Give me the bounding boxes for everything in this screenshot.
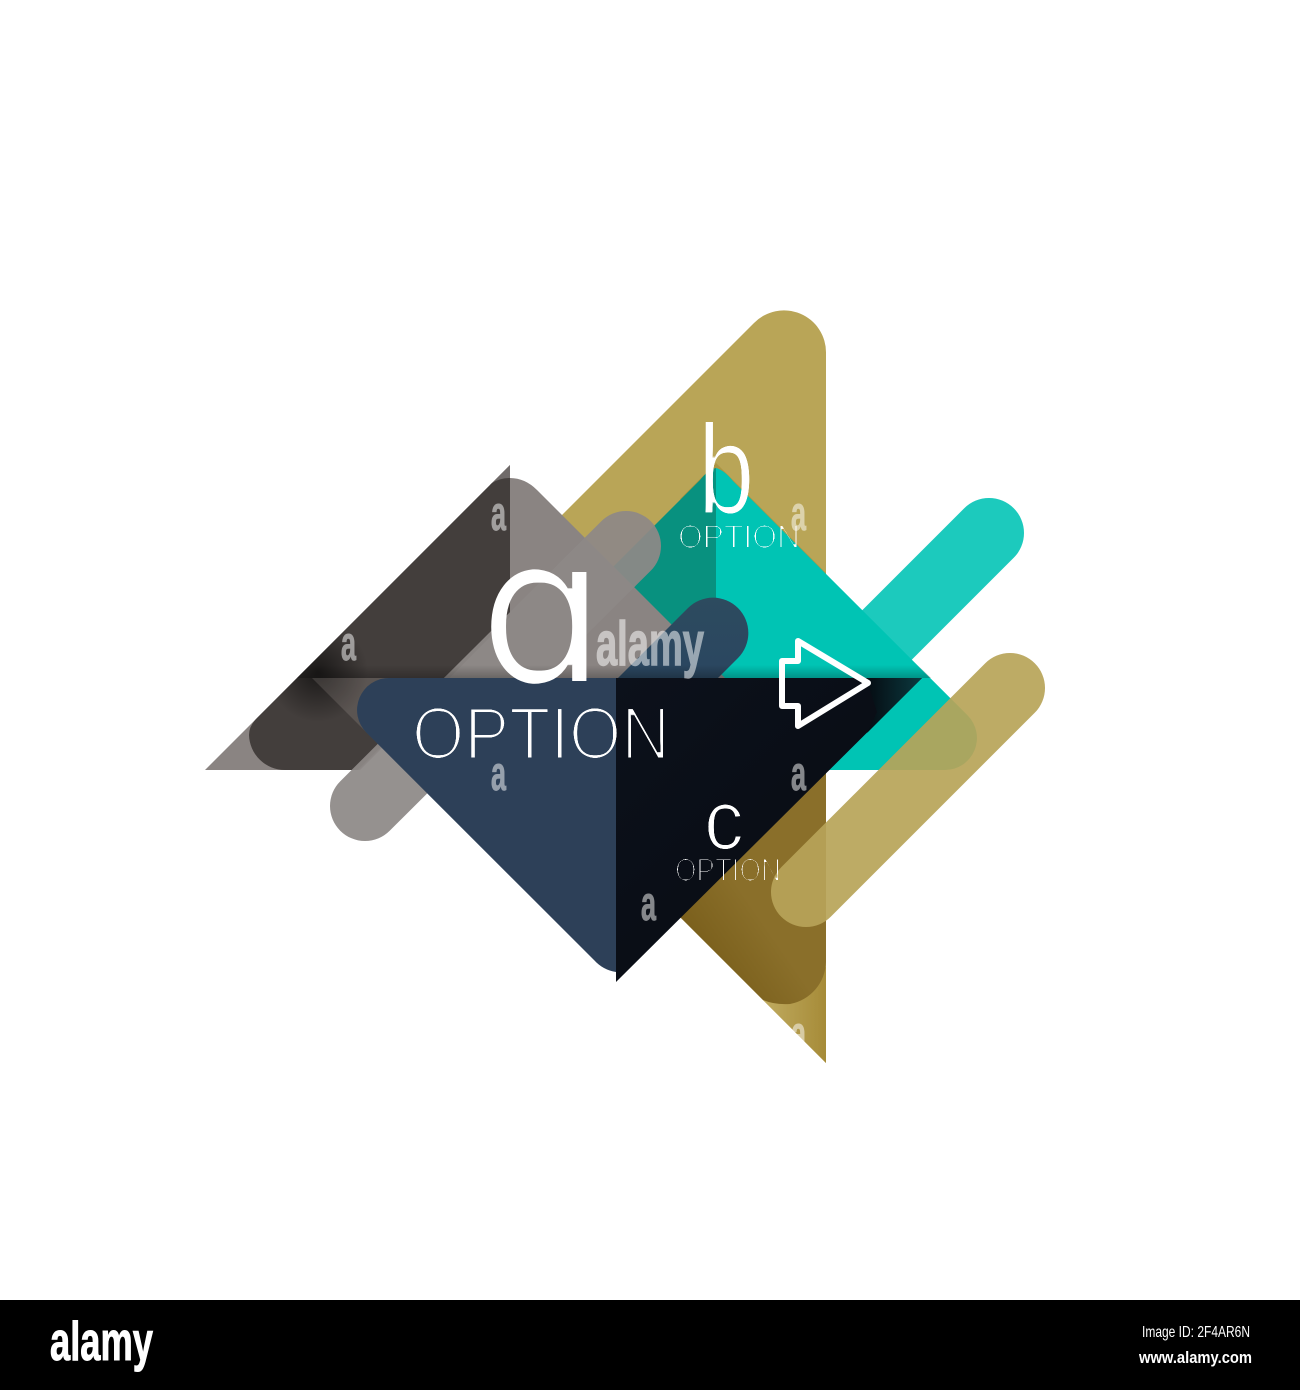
image id: Image ID: 2F4AR6N bbox=[1142, 1324, 1250, 1341]
watermark letters: a bbox=[491, 488, 506, 541]
footer logo: alamy bbox=[50, 1310, 153, 1372]
watermark letters: a bbox=[791, 488, 806, 541]
website: www.alamy.com bbox=[1138, 1348, 1252, 1367]
icon: outlined arrow bbox=[782, 641, 868, 726]
grey diagonal bar bbox=[365, 546, 626, 806]
watermark letters: a bbox=[791, 748, 806, 801]
letter a: ɑ bbox=[478, 494, 607, 730]
olive diagonal bar bbox=[806, 688, 1010, 892]
footer bar bbox=[0, 1300, 1300, 1390]
letter c: c bbox=[704, 774, 744, 867]
navy triangle panel bbox=[312, 678, 922, 982]
watermark letters: a bbox=[791, 1008, 806, 1061]
navy diagonal bar bbox=[610, 598, 748, 736]
dark left facet bbox=[249, 478, 510, 770]
letter b: b bbox=[698, 399, 755, 541]
watermark letters: a bbox=[491, 748, 506, 801]
olive large triangle bbox=[420, 310, 826, 1063]
watermark letters bbox=[341, 488, 806, 1061]
grey triangle panel bbox=[205, 465, 760, 770]
watermark letters: a bbox=[341, 618, 356, 671]
watermark logo: alamy bbox=[596, 610, 704, 679]
olive triangle dark overlay bbox=[600, 760, 826, 1004]
teal triangle panel bbox=[410, 468, 977, 770]
label OPTION b: OPTION bbox=[678, 518, 800, 555]
label OPTION c: OPTION bbox=[675, 852, 781, 888]
dark facet shadow bbox=[249, 478, 510, 770]
teal diagonal bar bbox=[800, 533, 989, 722]
heading OPTION a: OPTION bbox=[412, 692, 670, 775]
shadow above the navy panel bbox=[297, 665, 931, 678]
watermark letters: a bbox=[641, 878, 656, 931]
